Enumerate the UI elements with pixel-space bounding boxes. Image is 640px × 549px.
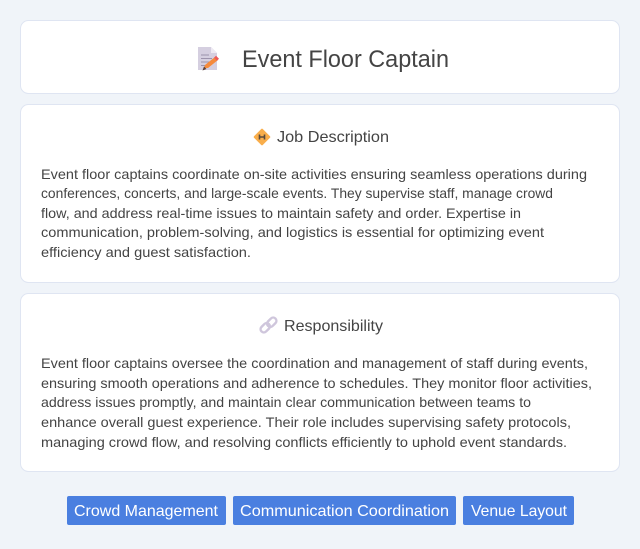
text block: responsibility: Event floor captains oversee the coordination and management of staff during events,	[41, 355, 588, 371]
text block: job description: efficiency and guest satisfaction.	[41, 244, 251, 260]
text block: responsibility	[41, 355, 592, 450]
tag: communication coordination	[233, 496, 456, 525]
tag: communication coordination: Communication Coordination	[240, 503, 449, 520]
title: Event Floor Captain	[242, 46, 449, 73]
text block: job description: Event floor captains coordinate on-site activities ensuring seamless operations during	[41, 166, 587, 182]
text block: job description: conferences, concerts, and large-scale events. They supervise staff, manage crowd	[41, 185, 553, 201]
tag: venue layout	[463, 496, 574, 525]
heading: job description: Job Description	[277, 129, 389, 146]
panel: responsibility	[20, 294, 620, 472]
tags row	[67, 496, 574, 525]
icon: road sign diamond	[255, 130, 269, 144]
text block: responsibility: managing crowd flow, and resolving conflicts efficiently to uphold event standards.	[41, 434, 567, 450]
panel: title card	[20, 20, 620, 94]
text block: job description: communication, problem-solving, and logistics is essential for optimizing event	[41, 224, 544, 240]
icon: document with pencil	[198, 47, 219, 70]
icon: chain link	[259, 316, 278, 334]
tag: venue layout: Venue Layout	[471, 503, 568, 520]
text block: responsibility: address issues promptly, and maintain clear communication between teams to	[41, 394, 531, 410]
heading: responsibility: Responsibility	[284, 318, 383, 335]
text block: job description: flow, and address real-time issues to maintain safety and order. Expertise in	[41, 205, 521, 221]
tag: crowd management: Crowd Management	[74, 503, 219, 520]
text block: job description	[41, 166, 587, 260]
tag: crowd management	[67, 496, 226, 525]
text block: responsibility: ensuring smooth operations and adherence to schedules. They monitor floor activities,	[41, 375, 592, 391]
text block: responsibility: enhance overall guest experience. Their role includes supervising safety protocols,	[41, 414, 571, 430]
panel: job description	[20, 104, 620, 282]
